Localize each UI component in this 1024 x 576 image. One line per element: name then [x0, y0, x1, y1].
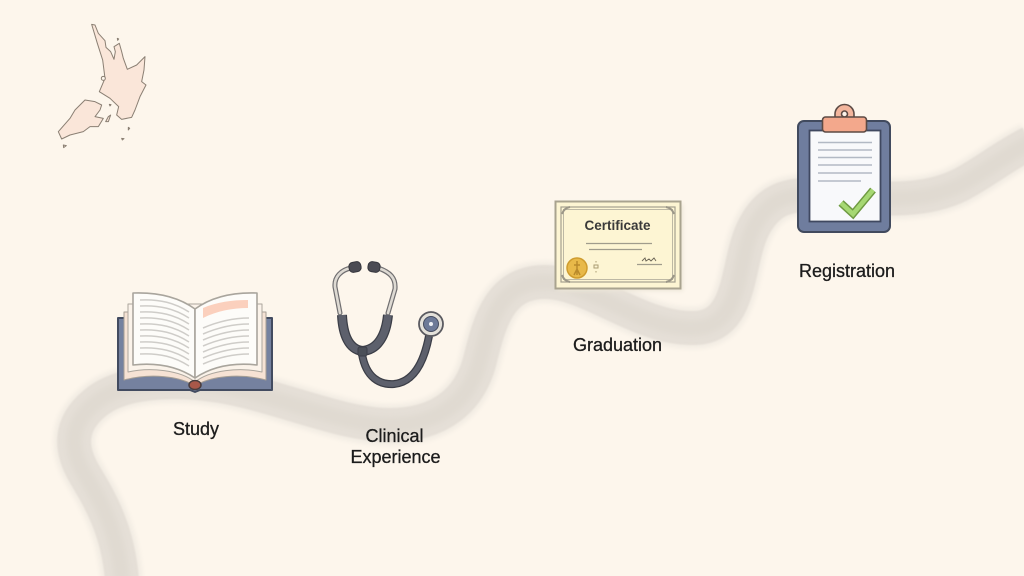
gold seal: [567, 258, 587, 278]
icon: New Zealand map: [58, 24, 146, 148]
label: Registration: Registration: [799, 261, 895, 281]
label: Clinical Experience: [350, 426, 441, 467]
clip: [822, 104, 866, 132]
label: Clinical Experience: Clinical: [365, 426, 424, 446]
icon: certificate: [556, 202, 683, 291]
icon: open book: [118, 293, 272, 392]
winding road path: [74, 143, 1024, 576]
label: Clinical Experience: Experience: [350, 447, 441, 467]
certificate title: Certificate: [584, 218, 651, 233]
icon: clipboard with checkmark: [798, 104, 890, 232]
highlighted text on book page: [203, 300, 248, 318]
label: Graduation: Graduation: [573, 335, 662, 355]
label: Study: Study: [173, 419, 219, 439]
icon: stethoscope: [335, 261, 443, 384]
green check: [841, 190, 873, 214]
